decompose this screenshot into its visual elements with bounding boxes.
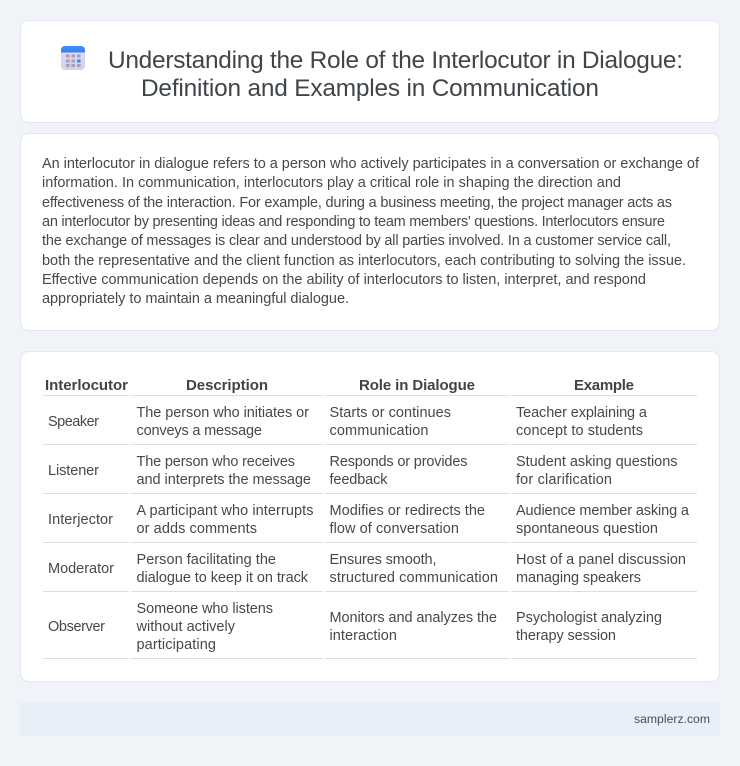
row: speaker: conveys a message [136,423,262,439]
row: speaker: concept to students [516,423,643,439]
row: moderator: structured communication [330,570,498,586]
row: interjector: flow of conversation [330,521,459,537]
paragraph text: appropriately to maintain a meaningful dialogue. [42,291,349,307]
paragraph text: an interlocutor by presenting ideas and responding to team members' questions. Interlocutors ensure [42,214,665,230]
row: interjector: A participant who interrupts [136,503,314,519]
panel: interlocutor table [20,352,720,682]
row: moderator: Moderator [48,561,114,577]
footer bar: samplerz.com [634,712,710,726]
paragraph text: Effective communication depends on the ability of interlocutors to listen, interpret, and respond [42,272,646,288]
row: speaker [48,405,648,439]
row: observer: without actively [136,619,236,635]
row: listener: Listener [48,463,99,479]
panel: definition paragraph [20,134,720,330]
row: listener: and interprets the message [136,472,311,488]
row: observer [48,601,662,653]
row: moderator: Host of a panel discussion [516,552,686,568]
paragraph text: information. In communication, interlocutors play a critical role in shaping the direction and [42,175,621,191]
row: listener: The person who receives [136,454,295,470]
row: observer: Monitors and analyzes the [330,610,497,626]
row: speaker: Teacher explaining a [516,405,648,421]
row: listener: feedback [330,472,388,488]
table header: Interlocutor [45,377,128,394]
row: moderator [48,552,686,586]
row: speaker: Starts or continues [330,405,451,421]
table header: Description [186,377,268,394]
row: observer: Someone who listens [136,601,273,617]
row: speaker: communication [330,423,428,439]
row: moderator: managing speakers [516,570,641,586]
row: interjector: Interjector [48,512,113,528]
row: interjector [48,503,690,537]
paragraph text: the exchange of messages is clear and understood by all parties involved. In a customer service call, [42,233,671,249]
icon: calendar [61,46,85,70]
paragraph text: both the representative and the client function as interlocutors, each contributing to solving the issue. [42,253,686,269]
row: interjector: Audience member asking a [516,503,690,519]
row: speaker: Speaker [48,414,99,430]
row: observer: Observer [48,619,105,635]
row: observer: interaction [330,628,397,644]
row: moderator: dialogue to keep it on track [136,570,309,586]
row: moderator: Person facilitating the [136,552,276,568]
row: interjector: Modifies or redirects the [330,503,485,519]
paragraph text [42,156,700,307]
row: speaker: The person who initiates or [136,405,309,421]
table header: Role in Dialogue [359,377,475,394]
paragraph text: An interlocutor in dialogue refers to a person who actively participates in a conversation or exchange of [42,156,700,172]
row: listener: Responds or provides [330,454,468,470]
table header [45,377,634,394]
row: observer: Psychologist analyzing [516,610,662,626]
row: listener: Student asking questions [516,454,678,470]
row: observer: therapy session [516,628,616,644]
row: listener: for clarification [516,472,612,488]
row: interjector: or adds comments [136,521,257,537]
title text [108,47,683,102]
title text: Definition and Examples in Communication [141,75,599,102]
title text: Understanding the Role of the Interlocutor in Dialogue: [108,47,683,74]
row: listener [48,454,678,488]
table header: Example [574,377,634,394]
row: interjector: spontaneous question [516,521,658,537]
row: observer: participating [136,637,216,653]
footer bar [20,702,720,736]
row: moderator: Ensures smooth, [330,552,436,568]
paragraph text: effectiveness of the interaction. For example, during a business meeting, the project manager acts as [42,195,672,211]
panel: title [20,20,720,122]
